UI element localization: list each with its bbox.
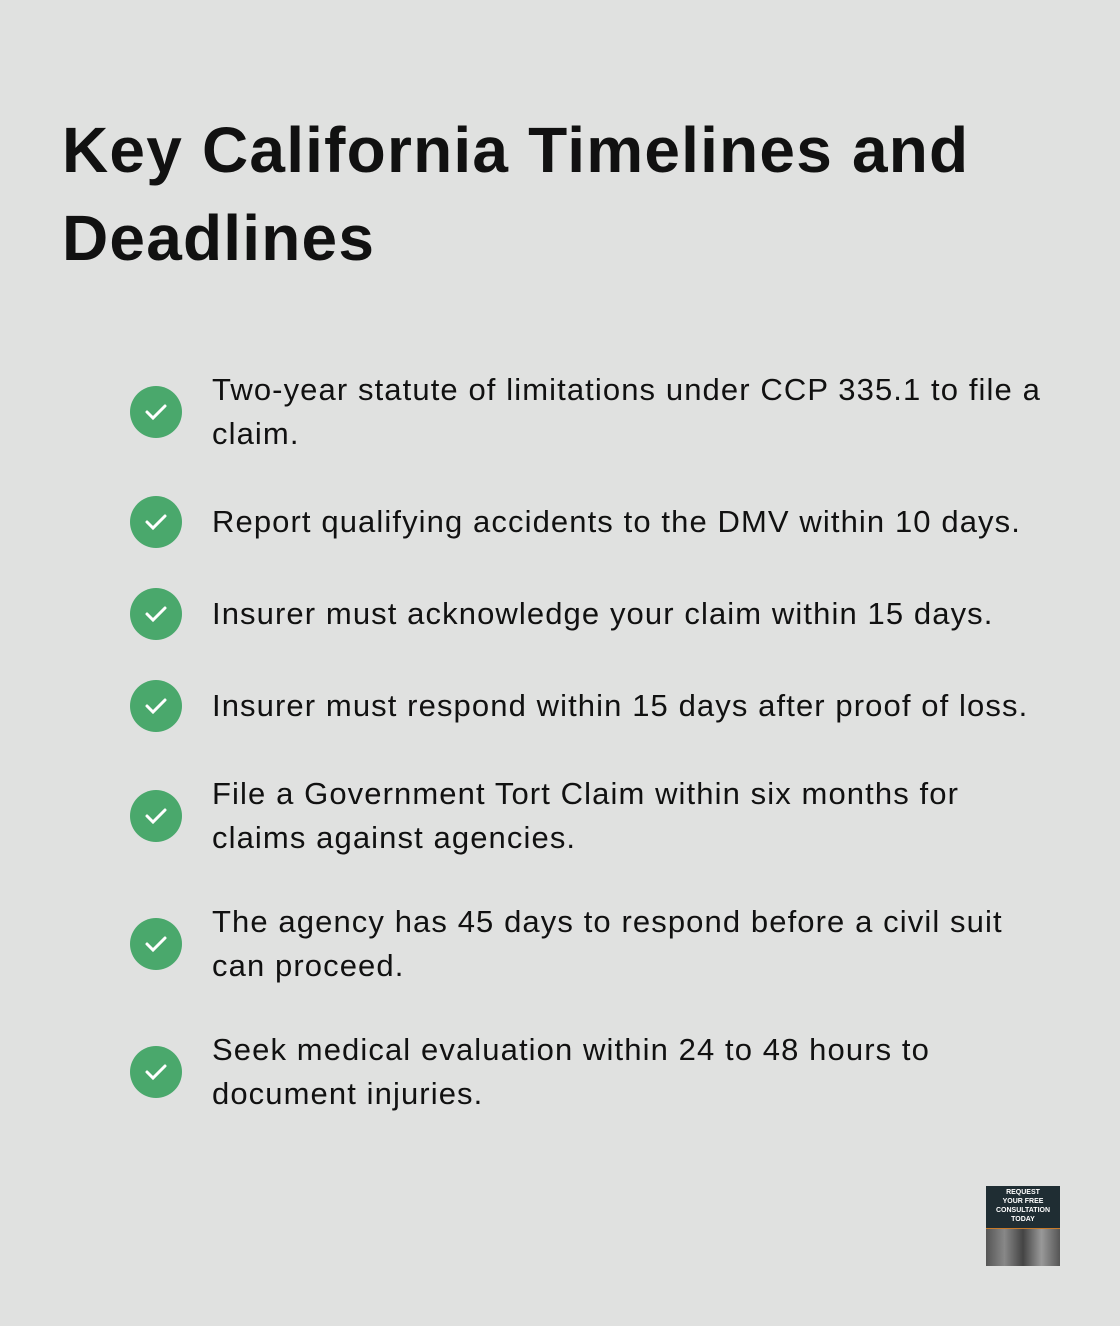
- text: can proceed.: [212, 948, 404, 983]
- logo: consultation badge: CONSULTATION: [996, 1207, 1050, 1214]
- logo: consultation badge: TODAY: [1011, 1216, 1035, 1223]
- icon: check: [130, 496, 182, 548]
- text: Insurer must acknowledge your claim within 15 days.: [212, 596, 993, 631]
- icon: check: [130, 918, 182, 970]
- icon: check: [130, 680, 182, 732]
- logo: consultation badge: [986, 1186, 1060, 1266]
- text: claims against agencies.: [212, 820, 576, 855]
- text: [212, 1032, 930, 1111]
- item 6: [130, 904, 1003, 983]
- icon: check: [130, 386, 182, 438]
- icon: check: [130, 588, 182, 640]
- logo: consultation badge: YOUR FREE: [1003, 1198, 1043, 1205]
- icon: check: [130, 790, 182, 842]
- item 7: [130, 1032, 930, 1111]
- title: [62, 114, 969, 274]
- logo: consultation badge: REQUEST: [1006, 1189, 1040, 1196]
- text: Two-year statute of limitations under CCP 335.1 to file a: [212, 372, 1041, 407]
- item 5: [130, 776, 959, 855]
- text: [212, 904, 1003, 983]
- item 4: [130, 680, 1028, 732]
- text: claim.: [212, 416, 300, 451]
- text: document injuries.: [212, 1076, 483, 1111]
- item 1: [130, 372, 1041, 451]
- item 3: [130, 588, 993, 640]
- text: Insurer must respond within 15 days after proof of loss.: [212, 688, 1028, 723]
- title: Deadlines: [62, 202, 375, 274]
- text: File a Government Tort Claim within six months for: [212, 776, 959, 811]
- text: [212, 776, 959, 855]
- text: [212, 372, 1041, 451]
- item 2: [130, 496, 1021, 548]
- title: Key California Timelines and: [62, 114, 969, 186]
- text: Report qualifying accidents to the DMV within 10 days.: [212, 504, 1021, 539]
- text: The agency has 45 days to respond before a civil suit: [212, 904, 1003, 939]
- text: Seek medical evaluation within 24 to 48 hours to: [212, 1032, 930, 1067]
- icon: check: [130, 1046, 182, 1098]
